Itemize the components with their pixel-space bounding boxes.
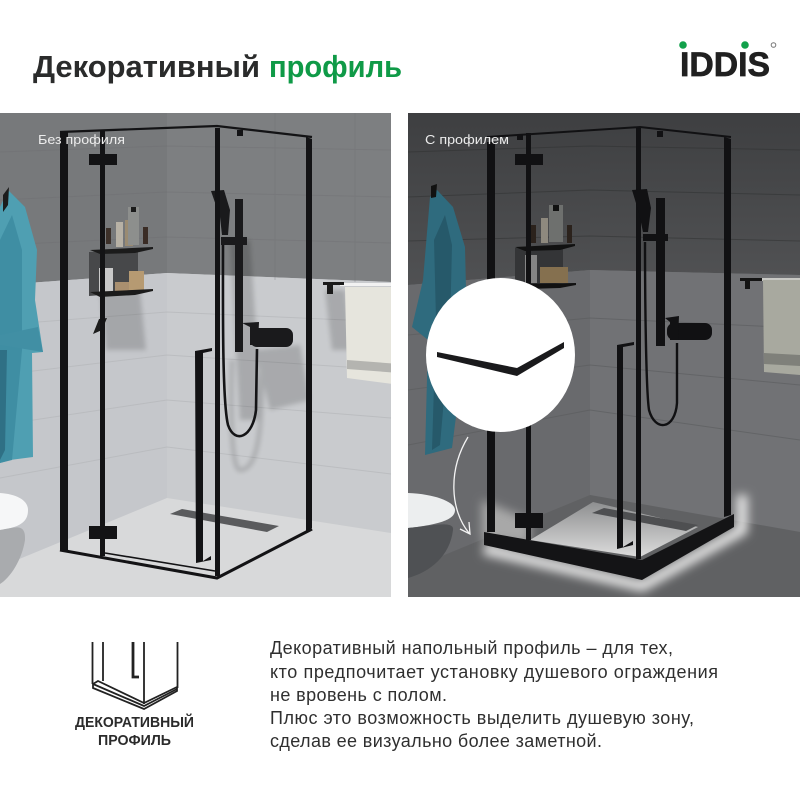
bathrobe bbox=[412, 184, 467, 455]
description text: сделав ее визуально более заметной. bbox=[270, 731, 602, 751]
towel rack bbox=[740, 278, 800, 375]
enclosure frame and mixer bbox=[487, 127, 731, 559]
lit floor inside the enclosure bbox=[530, 502, 698, 557]
panel: with profile bbox=[408, 113, 800, 597]
drain bbox=[592, 508, 698, 531]
toilet bbox=[0, 493, 28, 584]
bathrobe bbox=[0, 187, 43, 463]
title bbox=[33, 49, 402, 84]
description text: Декоративный напольный профиль – для тех, bbox=[270, 638, 673, 658]
dark wall tiles bbox=[408, 113, 800, 446]
title: Декоративный bbox=[33, 49, 260, 84]
floor glow bbox=[482, 495, 742, 586]
shower mixer and rail bbox=[211, 190, 293, 436]
decorative profile base bbox=[484, 514, 734, 580]
icon caption bbox=[75, 713, 194, 749]
description text: кто предпочитает установку душевого ограждения bbox=[270, 662, 718, 682]
label: without profile: Без профиля bbox=[38, 132, 125, 147]
title: профиль bbox=[269, 49, 402, 84]
shelf with bottles bbox=[515, 205, 576, 289]
zoom circle with profile bbox=[426, 278, 575, 432]
description text: Плюс это возможность выделить душевую зону, bbox=[270, 708, 694, 728]
label: with profile: С профилем bbox=[425, 132, 509, 147]
dark floor bbox=[408, 495, 800, 597]
shelf with bottles bbox=[89, 207, 153, 334]
glass frame bbox=[60, 126, 312, 578]
towel rack bbox=[323, 282, 391, 384]
wall tiles bbox=[0, 113, 391, 478]
icon caption: ПРОФИЛЬ bbox=[98, 732, 171, 749]
soft shadows bbox=[100, 240, 352, 470]
description text bbox=[270, 638, 718, 751]
drain bbox=[170, 509, 279, 532]
toilet bbox=[408, 493, 455, 578]
arrow bbox=[454, 437, 470, 534]
description text: не вровень с полом. bbox=[270, 685, 447, 705]
icon caption: ДЕКОРАТИВНЫЙ bbox=[75, 713, 194, 731]
floor bbox=[0, 498, 391, 597]
icon: decorative profile bbox=[92, 642, 178, 709]
logo: IDDIS: IDDIS bbox=[680, 46, 770, 84]
panel: without profile bbox=[0, 113, 400, 597]
